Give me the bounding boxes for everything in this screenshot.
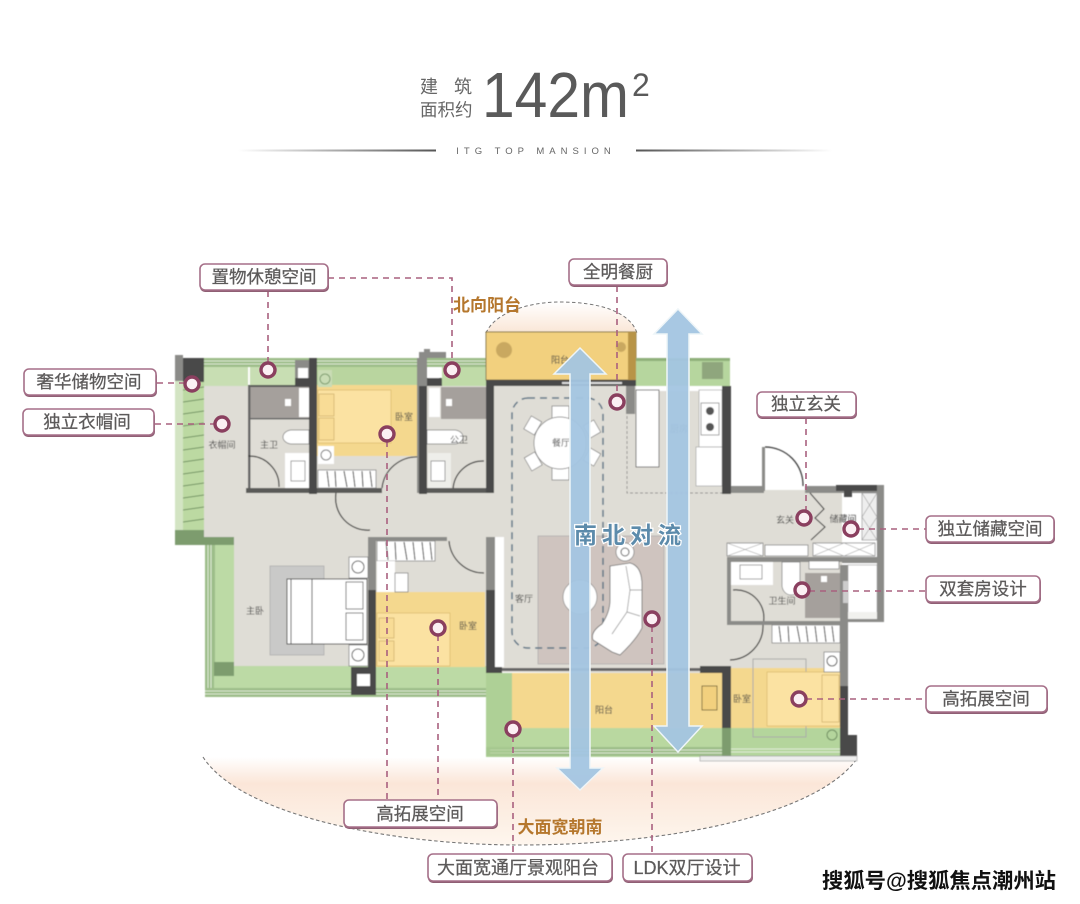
north balcony xyxy=(486,332,636,386)
floor xyxy=(204,385,842,675)
callout: 独立储藏空间 xyxy=(926,516,1055,544)
callout: 双套房设计 xyxy=(926,576,1041,604)
callout: 独立玄关: 独立玄关 xyxy=(771,394,841,414)
north balcony label: 北向阳台 xyxy=(453,295,521,315)
callout: 独立衣帽间 xyxy=(23,409,155,437)
south balcony xyxy=(486,666,731,760)
callout: 全明餐厨: 全明餐厨 xyxy=(583,262,653,282)
airflow arrow: south-north west xyxy=(554,348,606,790)
callout leader lines xyxy=(155,278,926,854)
title: building area 142m2: 面积约 xyxy=(420,100,472,120)
callout: LDK双厅设计: LDK双厅设计 xyxy=(633,858,741,878)
floor plan xyxy=(175,332,884,761)
callout: 置物休憩空间: 置物休憩空间 xyxy=(212,267,316,287)
guest bathroom: 卫生间 xyxy=(768,595,796,606)
dining and living room: 餐厅 xyxy=(552,437,570,448)
east bedroom: 卧室 xyxy=(733,693,751,704)
callout: 奢华储物空间 xyxy=(24,369,157,397)
airflow label: 南北对流 xyxy=(574,522,686,548)
callout: 高拓展空间 east xyxy=(926,686,1048,714)
interior walls west xyxy=(295,349,494,530)
callout: 高拓展空间 south: 高拓展空间 xyxy=(376,804,464,824)
master bathroom: 衣帽间 xyxy=(208,439,236,450)
subtitle rule: ITG TOP MANSION: ITG TOP MANSION xyxy=(456,146,616,157)
title: building area 142m2: 筑 xyxy=(454,77,472,97)
callout: 独立储藏空间: 独立储藏空间 xyxy=(938,519,1042,539)
title: building area 142m2 xyxy=(420,59,650,131)
master balcony green xyxy=(205,545,490,697)
callout: 独立衣帽间: 独立衣帽间 xyxy=(43,412,131,432)
entrance and storage: 储藏间 xyxy=(829,513,857,524)
east bedroom xyxy=(700,565,857,761)
callout: LDK双厅设计 xyxy=(623,854,753,883)
callout: 大面宽通厅景观阳台 xyxy=(428,854,613,883)
airflow arrow: south-north east xyxy=(654,309,702,752)
callout: 置物休憩空间 xyxy=(200,264,329,292)
master bedroom xyxy=(246,557,368,666)
title: building area 142m2: 2 xyxy=(632,67,650,103)
north sunlight zone xyxy=(486,302,637,333)
master bathroom: 主卫 xyxy=(260,439,278,450)
callout: 奢华储物空间: 奢华储物空间 xyxy=(36,372,142,392)
south frontage label: 大面宽朝南 xyxy=(518,817,602,837)
callout: 全明餐厨 xyxy=(569,259,668,287)
common bathroom xyxy=(417,387,487,493)
north terrace green xyxy=(204,358,490,387)
north balcony: 阳台 xyxy=(551,354,569,365)
common bathroom: 公卫 xyxy=(450,435,468,445)
south sunlight zone xyxy=(203,757,856,845)
south zone dashed outline xyxy=(203,757,856,845)
kitchen xyxy=(626,358,731,494)
callout: 双套房设计: 双套房设计 xyxy=(939,579,1027,599)
callout: 独立玄关 xyxy=(757,392,857,419)
title: building area 142m2: 建 xyxy=(420,77,438,97)
guest bathroom xyxy=(727,557,884,625)
callout pins xyxy=(185,363,858,736)
south balcony: 阳台 xyxy=(595,704,613,715)
dining and living room: 客厅 xyxy=(515,593,533,604)
north bedroom: 卧室 xyxy=(395,411,413,422)
callout: 高拓展空间 east: 高拓展空间 xyxy=(942,689,1030,709)
callout: 高拓展空间 south xyxy=(344,800,498,829)
entrance and storage: 玄关 xyxy=(776,514,794,525)
title: building area 142m2: 142m xyxy=(482,59,629,131)
master bathroom xyxy=(208,386,382,493)
west bedroom: 卧室 xyxy=(459,620,477,631)
dining and living room xyxy=(486,398,702,673)
watermark: 搜狐号@搜狐焦点潮州站 xyxy=(822,870,1056,893)
callout: 大面宽通厅景观阳台: 大面宽通厅景观阳台 xyxy=(437,858,599,878)
master bedroom: 主卧 xyxy=(246,605,264,616)
north bedroom xyxy=(316,370,419,488)
west storage strip xyxy=(175,355,234,545)
kitchen: 厨房 xyxy=(670,423,688,434)
west bedroom xyxy=(351,537,485,695)
entrance and storage xyxy=(727,447,884,620)
